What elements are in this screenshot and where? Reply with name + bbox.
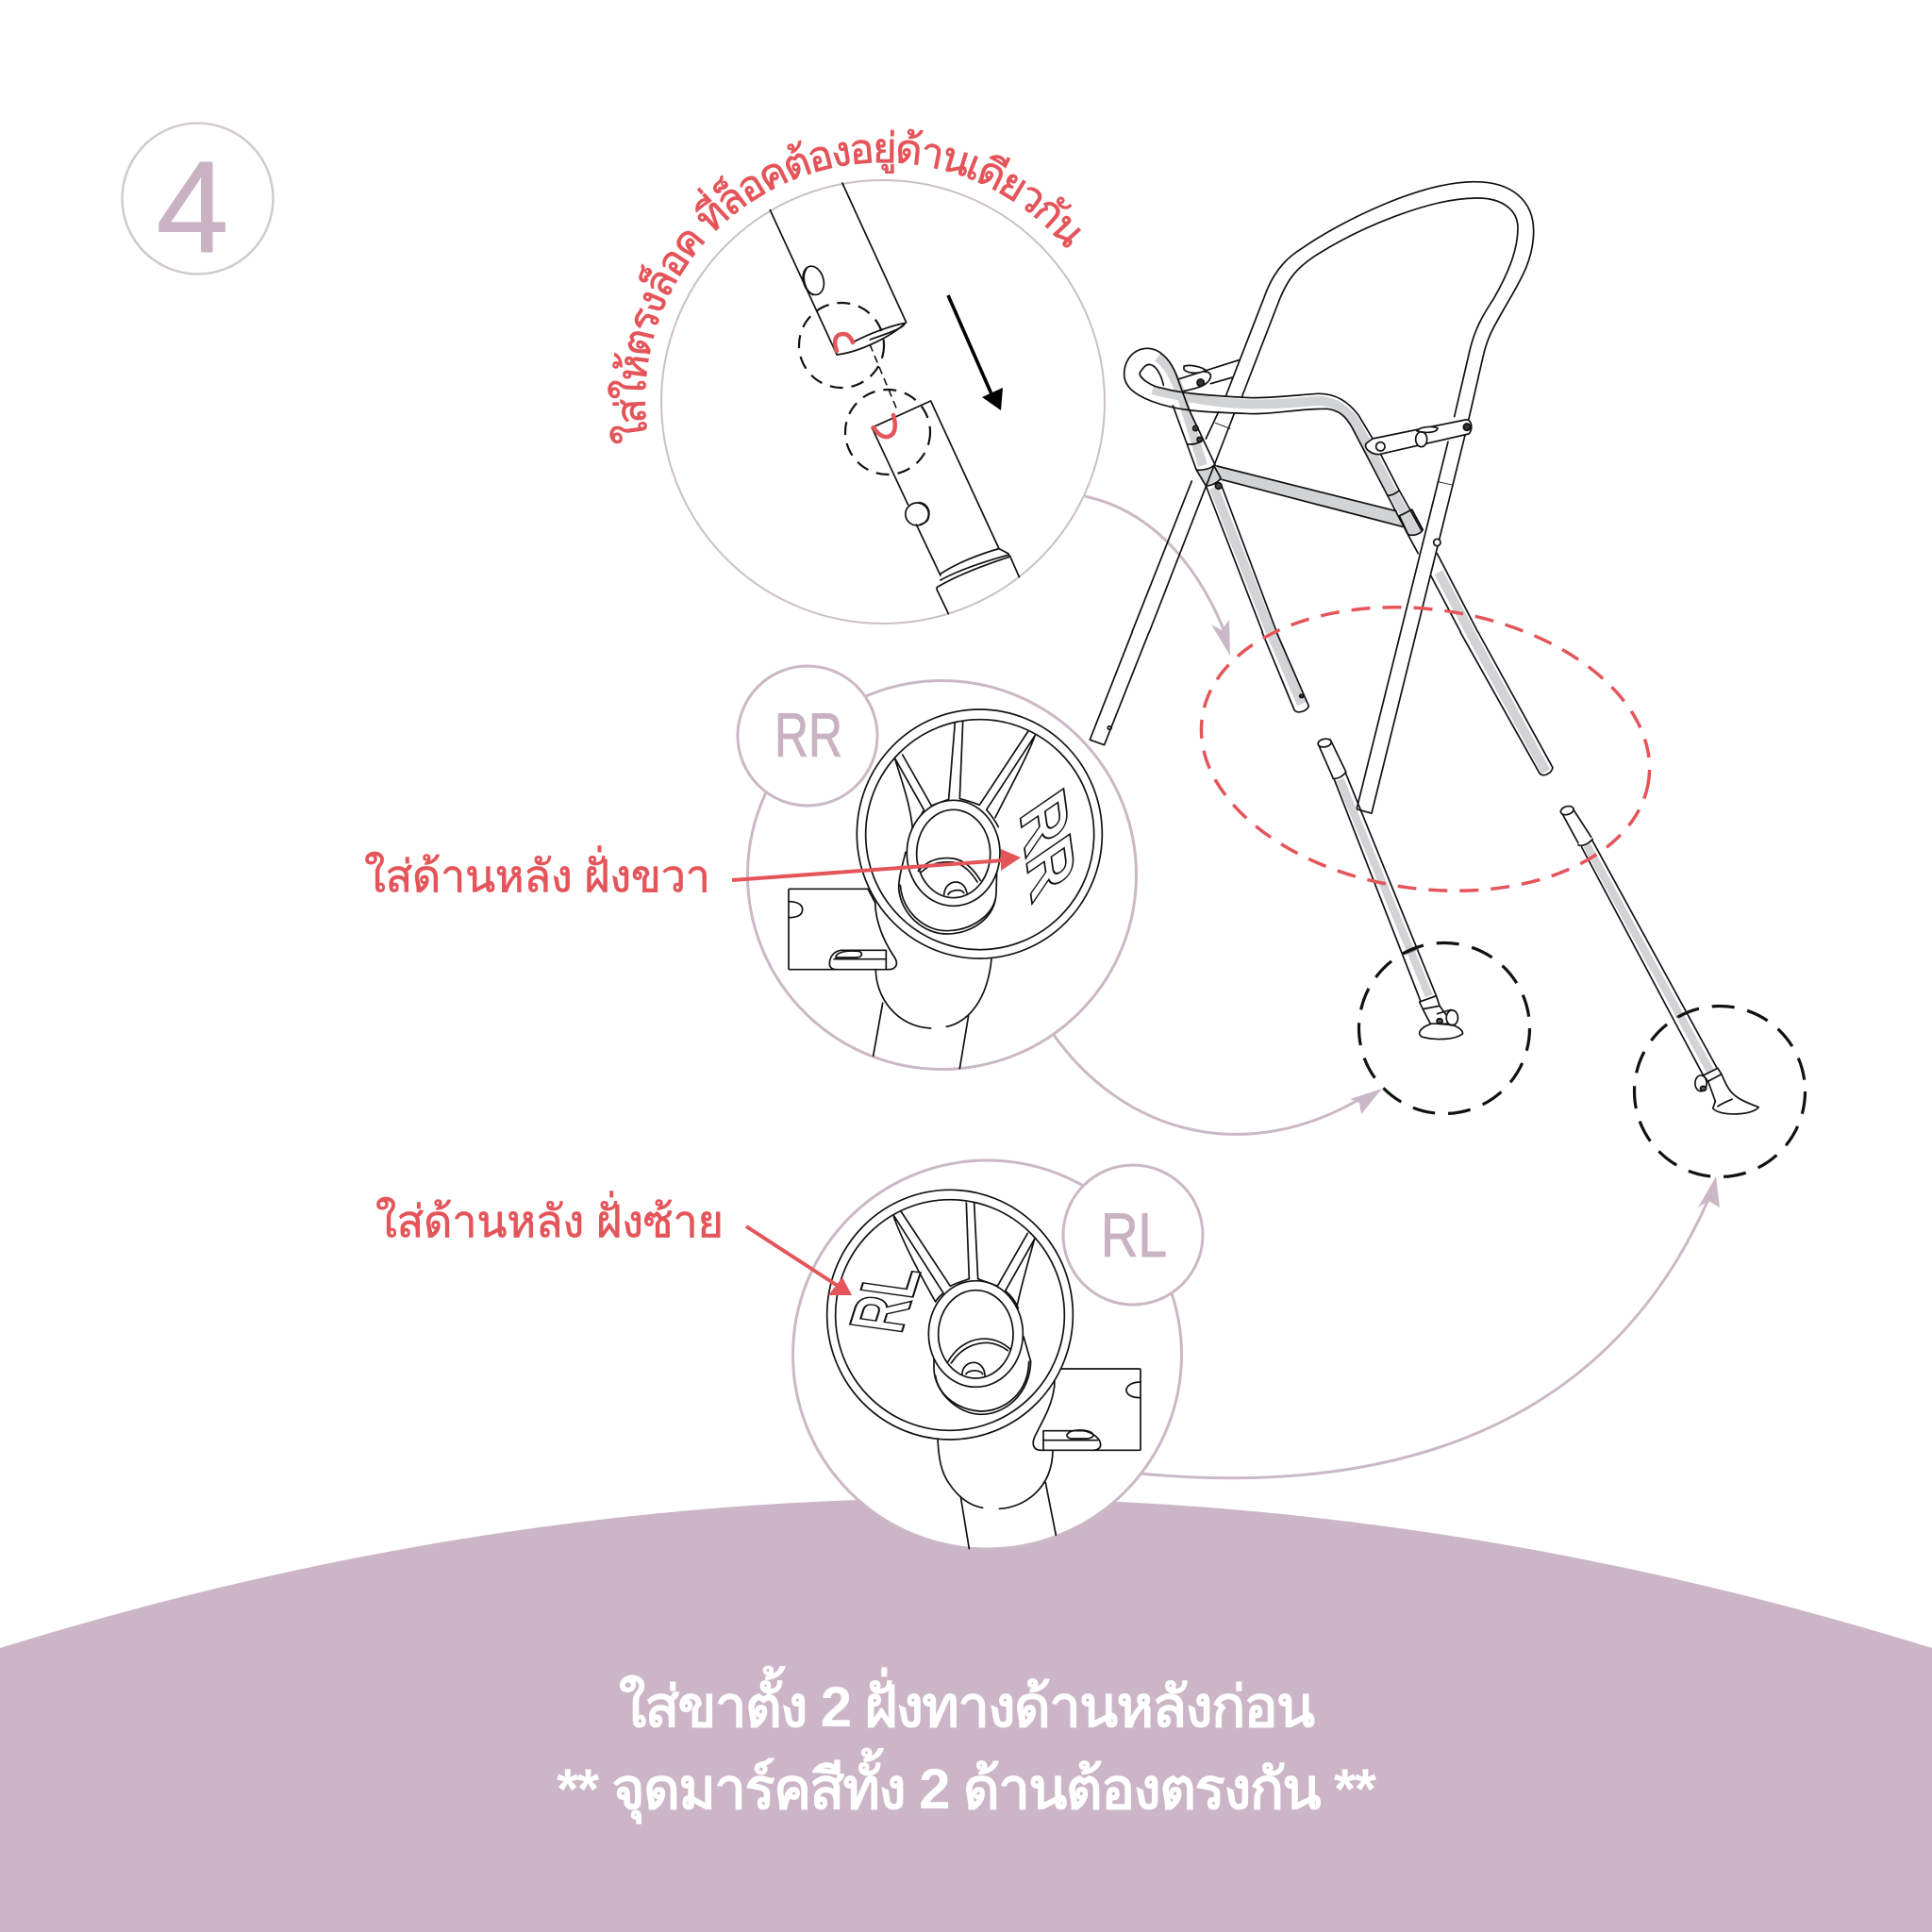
RR label circle — [738, 666, 877, 806]
rear leg A — [1317, 738, 1463, 1040]
bottom banner background — [0, 1498, 1932, 1932]
bath stand frame: upper — [1124, 182, 1534, 813]
connector arrow: RL detail to rear foot — [1140, 1176, 1720, 1478]
direction arrow — [948, 295, 1003, 410]
frame outlines — [1124, 182, 1534, 813]
step number badge: 4 — [157, 135, 228, 280]
connector arrow: RR detail to front foot — [1054, 1035, 1382, 1134]
bottom instruction text: ** จุดมาร์คสีทั้ง 2 ด้านต้องตรงกัน ** — [557, 1747, 1377, 1824]
rear leg B — [1559, 805, 1758, 1114]
RR label circle: RR — [774, 700, 842, 770]
dashed circle: rear foot — [1634, 1006, 1806, 1177]
RL embossed mark: RL — [834, 1261, 938, 1337]
panel: RL foot detail — [792, 1160, 1203, 1549]
dashed alignment line — [870, 344, 898, 412]
callout text: rear right: ใส่ด้านหลัง ฝั่งขวา — [364, 845, 710, 901]
RL label circle: RL — [1101, 1200, 1167, 1270]
step number badge — [123, 123, 274, 280]
dashed circle: front foot — [1358, 943, 1530, 1113]
bottom instruction text: ใส่ขาตั้ง 2 ฝั่งทางด้านหลังก่อน — [619, 1665, 1315, 1739]
panel: lock alignment detail — [661, 180, 1105, 624]
connector arrow: detail circle to red ellipse — [1085, 496, 1230, 656]
tube ends — [1090, 632, 1553, 813]
dashed lock circles — [799, 303, 930, 475]
panel: RR foot detail — [738, 666, 1136, 1070]
detail tube drawing — [770, 183, 1019, 614]
bottom instruction text — [557, 1665, 1377, 1824]
foot drawing RR — [789, 709, 1102, 1069]
grey stripes — [1271, 632, 1546, 772]
red lock marks — [835, 334, 895, 437]
curved caption: ใส่ให้ตรงล็อค ที่ล็อคต้องอยู่ด้านเดียวกัน — [608, 128, 1081, 443]
callout arrow: RR — [732, 849, 1021, 880]
bath stand frame: lower tube ends — [1090, 632, 1553, 813]
RR embossed mark: RR — [1007, 775, 1089, 914]
foot drawing RL — [827, 1190, 1141, 1549]
grey marks on tubes — [1153, 357, 1470, 632]
black tube marks — [1215, 423, 1452, 485]
RL label circle — [1063, 1165, 1203, 1305]
dashed red target ellipse — [1183, 579, 1668, 919]
callout text: rear left: ใส่ด้านหลัง ฝั่งซ้าย — [375, 1191, 724, 1246]
callout arrow: RL — [746, 1226, 852, 1295]
